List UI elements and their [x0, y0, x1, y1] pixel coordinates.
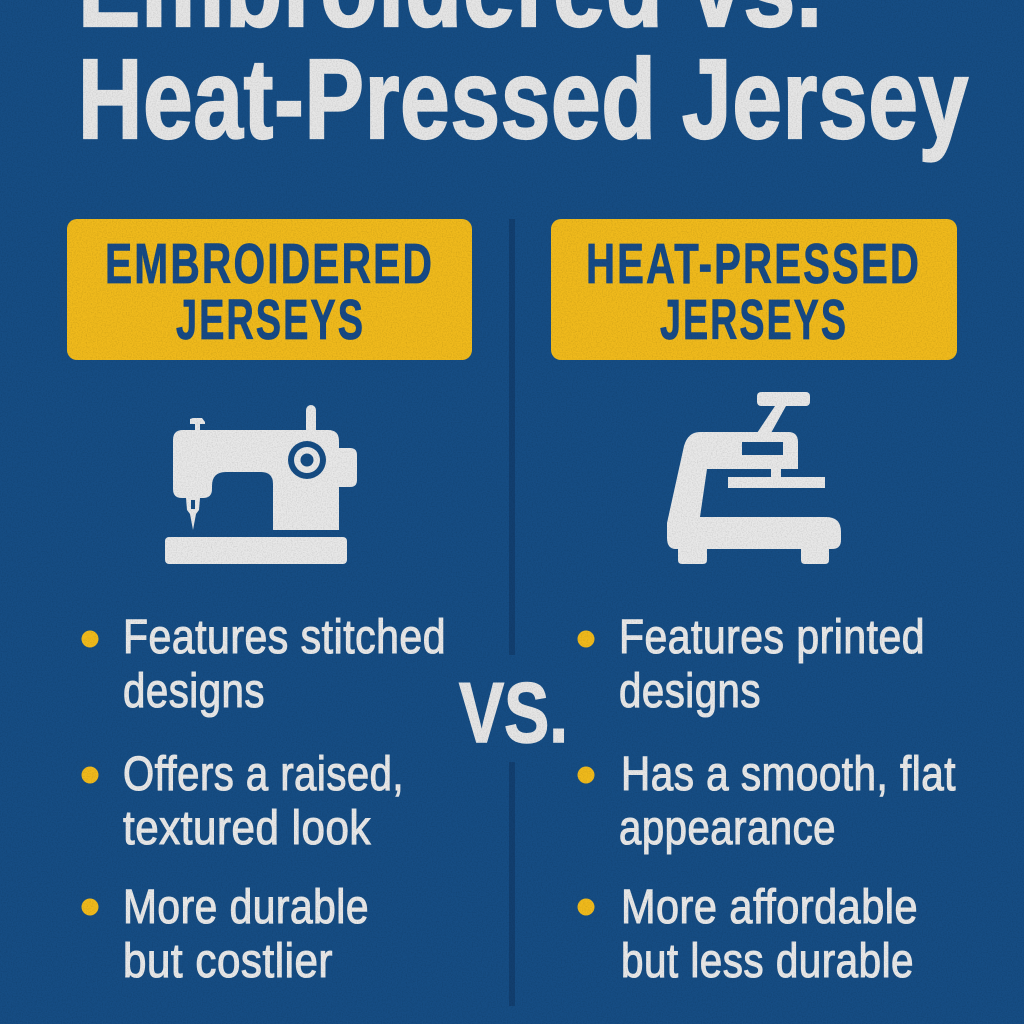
vs label: VS.: [459, 666, 568, 761]
heading badge: heat-pressed jerseys: [551, 219, 957, 360]
bullet: features printed designs: [578, 611, 925, 718]
bullet: features stitched designs: Features stitched: [123, 611, 446, 664]
bullet: more durable but costlier: More durable: [123, 881, 369, 934]
heading badge: embroidered jerseys: EMBROIDERED: [105, 232, 434, 296]
bullet: offers a raised, textured look: Offers a raised,: [123, 748, 404, 801]
bullet: offers a raised, textured look: textured look: [123, 802, 371, 855]
bullet: more affordable but less durable: More affordable: [621, 881, 918, 934]
bullet: features stitched designs: [82, 611, 446, 718]
bullet: offers a raised, textured look: [82, 748, 404, 855]
icon: heat press machine: [667, 392, 841, 564]
bullet: more affordable but less durable: [578, 881, 918, 988]
bullet: more durable but costlier: but costlier: [123, 935, 333, 988]
bullet: has a smooth, flat appearance: appearance: [619, 802, 836, 855]
heading badge: embroidered jerseys: JERSEYS: [176, 288, 365, 352]
panel: embroidered jerseys: [67, 219, 472, 988]
bullet: has a smooth, flat appearance: Has a smooth, flat: [621, 748, 956, 801]
bullet: features printed designs: designs: [619, 665, 761, 718]
bullet: features printed designs: Features printed: [619, 611, 925, 664]
bullet: more affordable but less durable: but less durable: [621, 935, 914, 988]
heading badge: heat-pressed jerseys: JERSEYS: [660, 288, 848, 352]
bullet: has a smooth, flat appearance: [578, 748, 956, 855]
center divider: [509, 219, 515, 1006]
bullet: more durable but costlier: [82, 881, 369, 988]
panel: heat-pressed jerseys: [551, 219, 957, 988]
icon: sewing machine: [165, 405, 357, 564]
heading badge: embroidered jerseys: [67, 219, 472, 360]
bullet: features stitched designs: designs: [123, 665, 265, 718]
